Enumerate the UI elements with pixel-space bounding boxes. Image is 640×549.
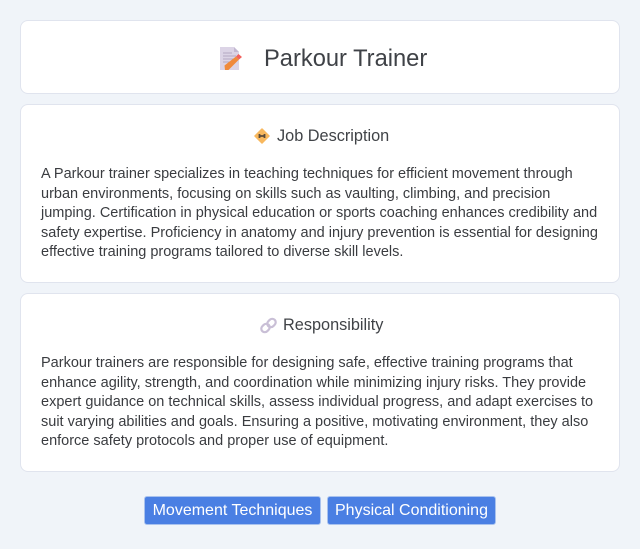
icon: document with pencil bbox=[220, 47, 242, 70]
panel: responsibility bbox=[20, 293, 620, 472]
text block: job description: effective training programs tailored to diverse skill levels. bbox=[41, 244, 403, 260]
text block: job description: urban environments, focusing on skills such as vaulting, climbing, and precision bbox=[41, 186, 550, 202]
text block: responsibility: suit varying abilities and goals. Ensuring a positive, motivating environment, they also bbox=[41, 414, 588, 430]
icon: diamond sign bbox=[254, 128, 270, 144]
tag: movement techniques: Movement Techniques bbox=[153, 502, 312, 519]
tag: physical conditioning: Physical Conditioning bbox=[335, 502, 488, 519]
tag: physical conditioning bbox=[327, 496, 496, 525]
text block: job description: A Parkour trainer specializes in teaching techniques for efficient movement through bbox=[41, 166, 573, 182]
heading: responsibility: Responsibility bbox=[283, 316, 383, 334]
text block: job description: jumping. Certification in physical education or sports coaching enhances credibility and bbox=[41, 205, 597, 221]
text block: job description bbox=[40, 166, 598, 260]
heading: job description: Job Description bbox=[277, 127, 389, 145]
icon: chain link bbox=[260, 318, 277, 334]
title: Parkour Trainer bbox=[264, 46, 427, 72]
panel: title card bbox=[20, 20, 620, 94]
tag: movement techniques bbox=[144, 496, 321, 525]
text block: responsibility: enforce safety protocols and proper use of equipment. bbox=[41, 433, 388, 449]
text block: job description: safety expertise. Proficiency in anatomy and injury prevention is essential for designing bbox=[41, 225, 598, 241]
panel: job description bbox=[20, 104, 620, 283]
text block: responsibility: Parkour trainers are responsible for designing safe, effective training programs that bbox=[41, 355, 573, 371]
text block: responsibility: expert guidance on technical skills, assess individual progress, and adapt exercises to bbox=[41, 394, 593, 410]
text block: responsibility: enhance agility, strength, and coordination while minimizing injury risks. They provide bbox=[41, 375, 586, 391]
text block: responsibility bbox=[41, 355, 593, 449]
